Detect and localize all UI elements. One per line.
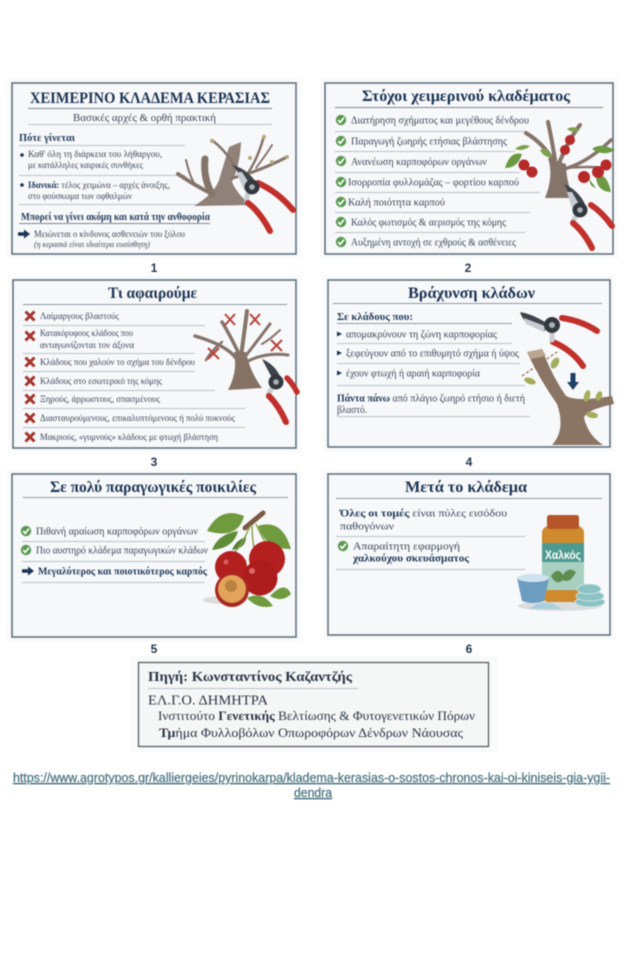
source link bbox=[13, 771, 610, 800]
bullet 2: ξεφεύγουν από το επιθυμητό σχήμα ή ύψος bbox=[346, 348, 519, 360]
illustration: cherry tree and pruners bbox=[505, 122, 615, 248]
note: reduced disease risk bbox=[18, 230, 185, 249]
goal 5: Καλή ποιότητα καρπού bbox=[348, 198, 445, 208]
item 2: Κατακόρυφους κλάδους που bbox=[40, 329, 133, 339]
item 3: Κλάδους που χαλούν το σχήμα του δένδρου bbox=[40, 358, 195, 368]
source link: dendra bbox=[294, 786, 332, 800]
item 5: Ξηρούς, άρρωστους, σπασμένους bbox=[40, 395, 160, 405]
note: always above a lateral bbox=[337, 394, 525, 416]
note: reduced disease risk: (η κερασιά είναι ιδιαίτερα ευαίσθητη) bbox=[34, 240, 150, 249]
illustration: bare tree and pruners bbox=[178, 135, 293, 231]
bullet: dormancy: Καθ' όλη τη διάρκεια του λήθαργου, bbox=[28, 150, 162, 160]
pruners bbox=[262, 359, 297, 422]
goal 2: Παραγωγή ζωηρής ετήσιας βλάστησης bbox=[351, 136, 508, 148]
subtitle: Βασικές αρχές & ορθή πρακτική bbox=[73, 113, 216, 124]
title: Στόχοι χειμερινού κλαδέματος bbox=[362, 88, 570, 105]
department: Τμήμα Φυλλοβόλων Οπωροφόρων Δένδρων Νάουσας bbox=[159, 725, 464, 740]
item 3: Μεγαλύτερος και ποιοτικότερος καρπός bbox=[38, 566, 208, 578]
goal 4: Ισορροπία φυλλομάζας – φορτίου καρπού bbox=[348, 178, 519, 188]
illustration: copper product bbox=[517, 515, 605, 611]
arrow down bbox=[567, 373, 579, 390]
bullet: ideal time: στο φούσκωμα των οφθαλμών bbox=[28, 192, 133, 202]
number 2: 2 bbox=[465, 261, 472, 275]
bullet: ideal time bbox=[20, 180, 170, 202]
source link: https://www.agrotypos.gr/kalliergeies/pyrinokarpa/kladema-kerasias-o-sostos-chronos-kai-oi-kiniseis-gia-ygii- bbox=[13, 771, 610, 785]
organisation: ΕΛ.Γ.Ο. ΔΗΜΗΤΡΑ bbox=[148, 692, 268, 708]
label word: Χαλκός bbox=[545, 550, 581, 562]
source box bbox=[130, 656, 497, 752]
number 6: 6 bbox=[466, 642, 473, 656]
panel 5: very productive varieties bbox=[7, 469, 301, 642]
intro text: παθογόνων bbox=[340, 522, 395, 532]
title: Μετά το κλάδεμα bbox=[405, 479, 527, 496]
institute: Ινστιτούτο Γενετικής Βελτίωσης & Φυτογενετικών Πόρων bbox=[158, 708, 475, 723]
item 7: Μακριούς, «γυμνούς» κλάδους με φτωχή βλάστηση bbox=[40, 433, 218, 443]
goal 1: Διατήρηση σχήματος και μεγέθους δένδρου bbox=[351, 116, 529, 126]
bullet 1: απομακρύνουν τη ζώνη καρποφορίας bbox=[346, 330, 497, 340]
item 4: Κλάδους στο εσωτερικό της κόμης bbox=[40, 377, 162, 387]
item 6: Διασταυρούμενους, επικαλυπτόμενους ή πολύ πυκνούς bbox=[40, 414, 235, 424]
item 1: Λαίμαργους βλαστούς bbox=[40, 312, 119, 322]
bullet: dormancy bbox=[20, 150, 162, 171]
heading: on branches that: Σε κλάδους που: bbox=[337, 311, 413, 323]
required copper application: χαλκούχου σκευάσματος bbox=[352, 554, 470, 564]
illustration: tree with cut marks and pruners bbox=[195, 311, 297, 422]
intro text bbox=[339, 508, 508, 532]
pruners bbox=[520, 312, 597, 366]
item 1: Πιθανή αραίωση καρποφόρων οργάνων bbox=[36, 526, 198, 538]
heading: also at flowering: Μπορεί να γίνει ακόμη και κατά την ανθοφορία bbox=[21, 212, 210, 223]
title: Τι αφαιρούμε bbox=[108, 285, 197, 302]
item 2: Πιο αυστηρό κλάδεμα παραγωγικών κλάδων bbox=[36, 546, 208, 556]
item 2: ανταγωνίζονται τον άξονα bbox=[40, 340, 134, 351]
required copper application: Απαραίτητη εφαρμογή bbox=[353, 542, 460, 552]
required copper application bbox=[338, 541, 470, 564]
number 5: 5 bbox=[151, 642, 158, 656]
bullet: ideal time: Ιδανικά: τέλος χειμώνα – αρχές άνοιξης, bbox=[28, 180, 170, 191]
bullet 3: έχουν φτωχή ή αραιή καρποφορία bbox=[346, 368, 481, 380]
panel 4: shortening branches bbox=[323, 275, 615, 452]
panel 2: goals of winter pruning bbox=[320, 78, 618, 259]
intro text: Όλες οι τομές είναι πύλες εισόδου bbox=[339, 508, 508, 520]
pruners bbox=[232, 165, 293, 231]
bullet: dormancy: με κατάλληλες καιρικές συνθήκες bbox=[28, 161, 143, 171]
number 1: 1 bbox=[151, 261, 158, 275]
note: always above a lateral: Πάντα πάνω από πλάγιο ζωηρό ετήσιο ή διετή bbox=[337, 394, 525, 404]
heading: when: Πότε γίνεται bbox=[19, 132, 76, 144]
title: Σε πολύ παραγωγικές ποικιλίες bbox=[50, 479, 256, 496]
goal 7: Αυξημένη αντοχή σε εχθρούς & ασθένειες bbox=[351, 238, 517, 248]
title: Βράχυνση κλάδων bbox=[408, 285, 535, 302]
panel 3: what to remove bbox=[8, 275, 301, 453]
item 2 bbox=[26, 329, 134, 351]
title: ΧΕΙΜΕΡΙΝΟ ΚΛΑΔΕΜΑ ΚΕΡΑΣΙΑΣ bbox=[30, 90, 270, 107]
note: reduced disease risk: Μειώνεται ο κίνδυνος ασθενειών του ξύλου bbox=[34, 230, 185, 240]
goal 3: Ανανέωση καρποφόρων οργάνων bbox=[351, 157, 487, 168]
source author: Πηγή: Κωνσταντίνος Καζαντζής bbox=[148, 669, 352, 684]
pruners bbox=[564, 184, 612, 248]
goal 6: Καλός φωτισμός & αερισμός της κόμης bbox=[351, 218, 507, 228]
illustration: cherries bbox=[203, 513, 291, 607]
panel 6: after pruning bbox=[323, 469, 615, 640]
note: always above a lateral: βλαστό. bbox=[337, 405, 367, 416]
number 4: 4 bbox=[466, 455, 473, 469]
panel 1: winter pruning basics bbox=[7, 78, 301, 259]
number 3: 3 bbox=[151, 455, 158, 469]
illustration: branch cut with pruners and arrow bbox=[520, 312, 614, 445]
